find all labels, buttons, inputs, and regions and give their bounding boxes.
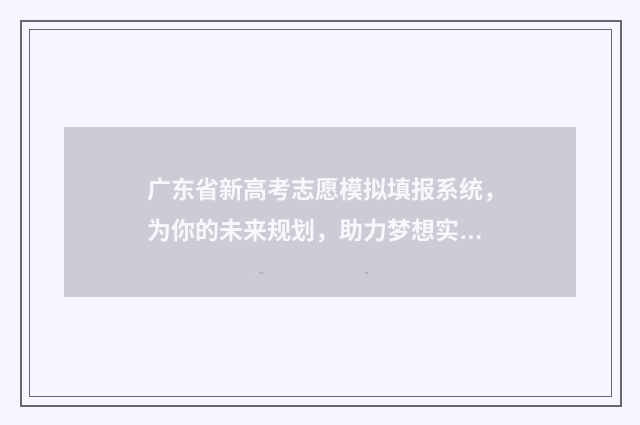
title text: 为你的未来规划，助力梦想实... <box>147 218 483 245</box>
inner frame <box>29 29 612 397</box>
panel: title banner <box>64 127 576 297</box>
title text <box>147 177 507 245</box>
title text: 广东省新高考志愿模拟填报系统， <box>147 177 507 204</box>
faint marks right <box>365 272 368 274</box>
faint marks left <box>250 272 264 274</box>
